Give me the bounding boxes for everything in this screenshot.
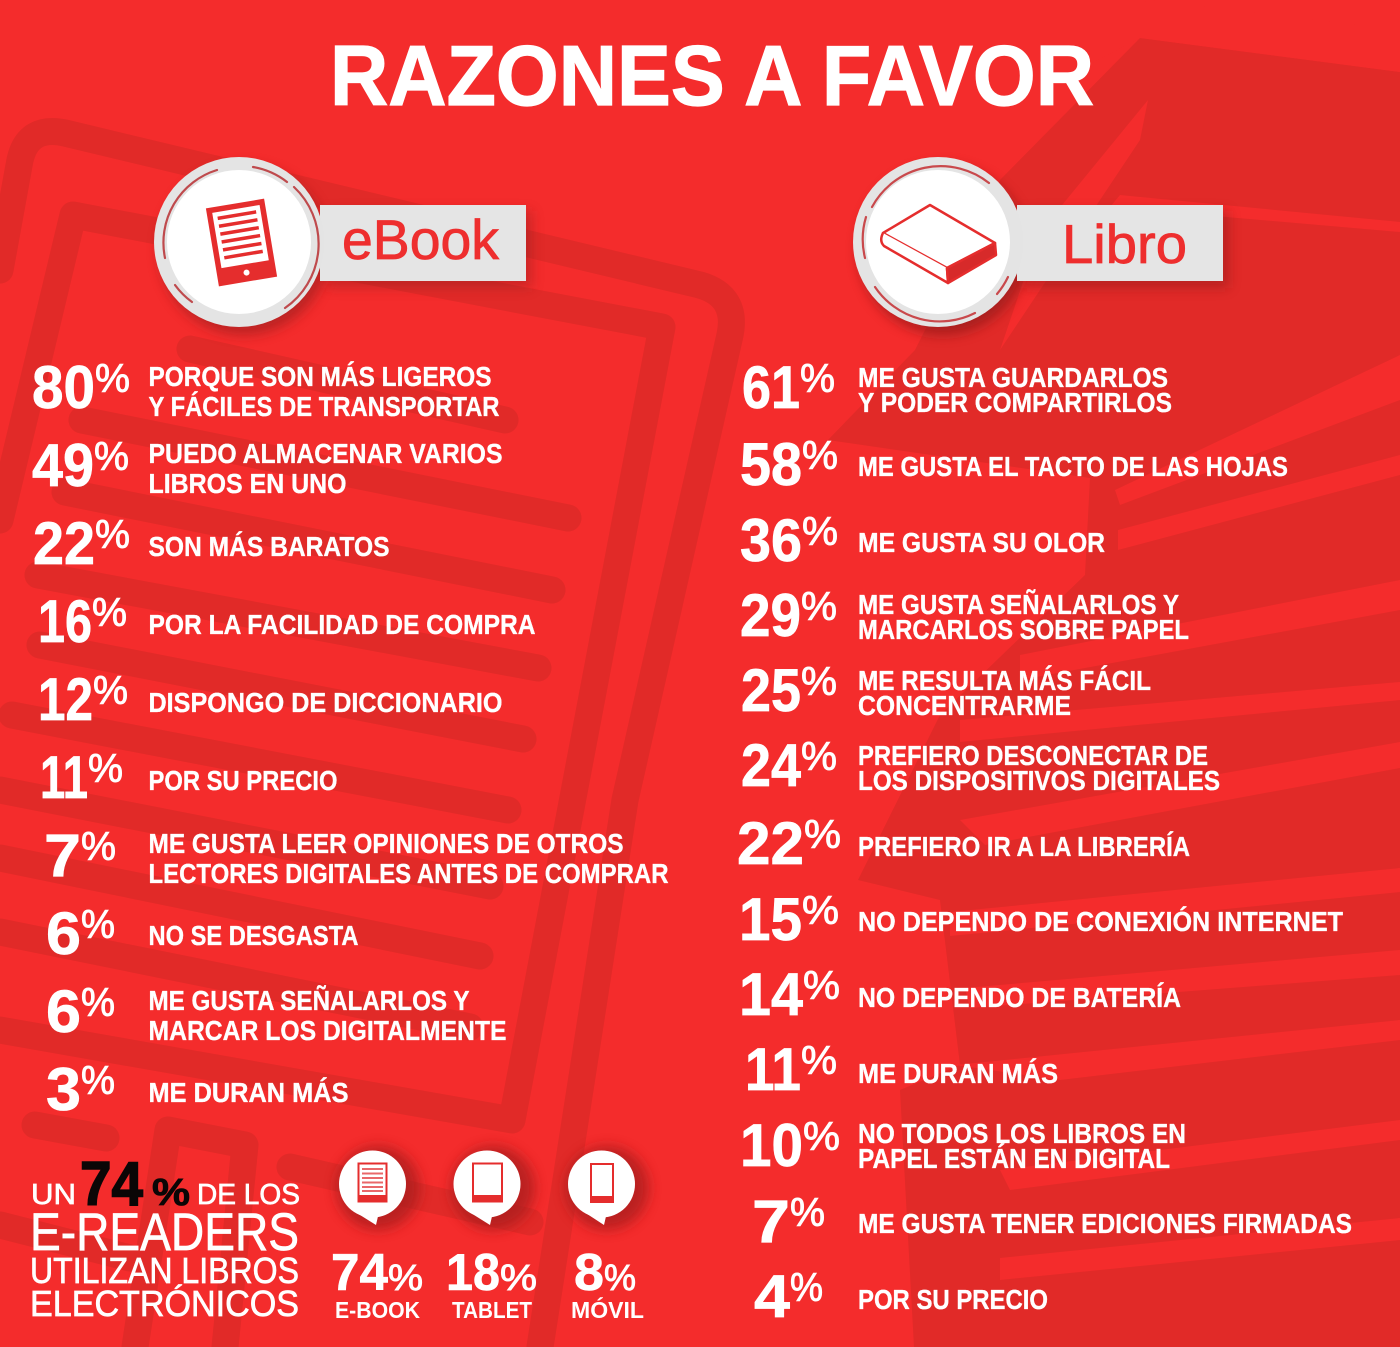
icon: book — [881, 205, 996, 283]
ebook row: 3%: 3 — [46, 1056, 81, 1123]
libro row: 10%: % — [803, 1115, 840, 1159]
device stat: movil: MÓVIL — [571, 1296, 644, 1323]
ebook row: 6% señalarlos: 6 — [46, 978, 81, 1045]
ebook row: 16% — [38, 588, 536, 655]
ebook row: 49%: % — [94, 435, 129, 479]
libro row: 29%: % — [801, 585, 837, 629]
libro row: 25%: 25 — [741, 657, 801, 724]
ebook row: 49% — [32, 432, 502, 499]
ebook row: 7%: LECTORES DIGITALES ANTES DE COMPRAR — [148, 858, 669, 889]
ebook row: 22% — [33, 510, 390, 577]
libro row: 58%: ME GUSTA EL TACTO DE LAS HOJAS — [858, 451, 1288, 482]
libro row: 29%: 29 — [740, 582, 801, 649]
libro row: 58%: 58 — [740, 431, 802, 498]
ebook row: 16%: % — [92, 591, 127, 635]
libro row: 61%: ME GUSTA GUARDARLOS — [858, 362, 1168, 393]
device stat: movil: % — [604, 1257, 636, 1298]
ebook row: 12%: DISPONGO DE DICCIONARIO — [148, 687, 502, 718]
header: Libro — [853, 157, 1229, 335]
ebook row: 7% — [44, 822, 669, 889]
libro row: 7% — [752, 1188, 1352, 1255]
libro row: 10%: NO TODOS LOS LIBROS EN — [858, 1118, 1186, 1149]
libro row: 15%: % — [802, 889, 839, 933]
libro row: 11% — [745, 1036, 1058, 1103]
ebook row: 16%: POR LA FACILIDAD DE COMPRA — [148, 609, 536, 640]
ebook row: 3% — [46, 1056, 348, 1123]
libro row: 14%: NO DEPENDO DE BATERÍA — [858, 982, 1181, 1013]
ebook row: 12%: 12 — [38, 666, 93, 733]
ebook row: 6% señalarlos: MARCAR LOS DIGITALMENTE — [148, 1015, 506, 1046]
icon: e-reader — [206, 199, 277, 286]
title: RAZONES A FAVOR — [330, 29, 1094, 124]
callout: 74% of e-readers: DE LOS — [197, 1179, 300, 1211]
header: eBook — [154, 157, 532, 335]
callout: 74% of e-readers: E-READERS — [30, 1203, 299, 1262]
ebook row: 80%: Y FÁCILES DE TRANSPORTAR — [148, 391, 500, 422]
ebook row: 6% no se desgasta: NO SE DESGASTA — [148, 920, 359, 951]
ebook row: 80%: % — [95, 357, 130, 401]
libro row: 22%: 22 — [737, 810, 804, 877]
background: tilted ebook outline — [0, 132, 731, 1347]
libro row: 58%: % — [802, 434, 838, 478]
libro row: 15%: 15 — [739, 886, 802, 953]
device stat: tablet: TABLET — [452, 1297, 532, 1323]
icon: tablet bubble — [451, 1146, 535, 1230]
ebook row: 7%: % — [81, 825, 116, 869]
ebook row: 49%: 49 — [32, 432, 94, 499]
ebook row: 11% — [40, 744, 338, 811]
callout: 74% of e-readers: ELECTRÓNICOS — [30, 1283, 299, 1324]
icon: e-book bubble — [336, 1146, 420, 1230]
libro row: 7%: 7 — [752, 1188, 790, 1255]
libro row: 25%: ME RESULTA MÁS FÁCIL — [858, 665, 1151, 696]
libro row: 61%: Y PODER COMPARTIRLOS — [858, 387, 1172, 418]
ebook row: 80% — [32, 354, 500, 422]
ebook row: 49%: PUEDO ALMACENAR VARIOS — [148, 438, 502, 469]
libro row: 24%: PREFIERO DESCONECTAR DE — [858, 740, 1208, 771]
libro row: 11%: % — [801, 1039, 837, 1083]
libro row: 22%: PREFIERO IR A LA LIBRERÍA — [858, 831, 1190, 862]
ebook row: 7%: ME GUSTA LEER OPINIONES DE OTROS — [148, 828, 624, 859]
libro row: 25%: % — [801, 660, 837, 704]
libro row: 36%: 36 — [740, 507, 802, 574]
libro row: 36%: ME GUSTA SU OLOR — [858, 527, 1105, 558]
callout: 74% of e-readers: UTILIZAN LIBROS — [30, 1250, 299, 1291]
libro row: 15%: NO DEPENDO DE CONEXIÓN INTERNET — [858, 906, 1343, 937]
libro row: 7%: ME GUSTA TENER EDICIONES FIRMADAS — [858, 1208, 1352, 1239]
libro row: 61% — [742, 354, 1172, 421]
label: Libro: Libro — [1062, 213, 1187, 275]
libro row: 24% — [741, 732, 1220, 799]
ebook row: 49%: LIBROS EN UNO — [148, 468, 346, 499]
background: tilted book shape — [828, 0, 1400, 1347]
libro row: 29%: MARCARLOS SOBRE PAPEL — [858, 614, 1189, 645]
libro row: 58% — [740, 431, 1288, 498]
device stat: movil — [565, 1146, 649, 1323]
device stat: tablet: % — [500, 1257, 537, 1298]
libro row: 10%: PAPEL ESTÁN EN DIGITAL — [858, 1143, 1170, 1174]
libro row: 14%: 14 — [739, 961, 804, 1028]
device stat: e-book: 74 — [331, 1244, 388, 1302]
ebook row: 6% señalarlos — [46, 978, 506, 1046]
ebook row: 11%: % — [88, 747, 123, 791]
ebook row: 6% no se desgasta — [46, 900, 359, 967]
libro row: 10%: 10 — [740, 1112, 803, 1179]
ebook row: 22%: % — [95, 513, 130, 557]
device stat: tablet: 18 — [446, 1244, 500, 1302]
device stat: tablet — [446, 1146, 537, 1323]
label: eBook: eBook — [342, 208, 500, 271]
libro row: 22%: % — [804, 813, 841, 857]
ebook row: 22%: SON MÁS BARATOS — [148, 531, 390, 562]
libro row: 11%: 11 — [745, 1036, 801, 1103]
ebook row: 22%: 22 — [33, 510, 95, 577]
ebook row: 11%: 11 — [40, 744, 88, 811]
callout: 74% of e-readers: % — [152, 1172, 190, 1214]
ebook row: 80%: PORQUE SON MÁS LIGEROS — [148, 361, 492, 392]
libro row: 61%: 61 — [742, 354, 800, 421]
libro row: 4%: 4 — [754, 1263, 791, 1330]
libro row: 25% — [741, 657, 1151, 724]
libro row: 10% — [740, 1112, 1186, 1179]
ebook row: 6% señalarlos: ME GUSTA SEÑALARLOS Y — [148, 985, 470, 1016]
device stat: e-book — [331, 1146, 423, 1323]
libro row: 24%: LOS DISPOSITIVOS DIGITALES — [858, 765, 1220, 796]
ebook row: 12% — [38, 666, 502, 733]
libro row: 4%: POR SU PRECIO — [858, 1284, 1048, 1315]
libro row: 29%: ME GUSTA SEÑALARLOS Y — [858, 589, 1179, 620]
ebook row: 7%: 7 — [44, 822, 81, 889]
callout: 74% of e-readers — [30, 1150, 300, 1324]
ebook row: 16%: 16 — [38, 588, 92, 655]
libro row: 11%: ME DURAN MÁS — [858, 1058, 1058, 1089]
libro row: 36% — [740, 507, 1105, 574]
ebook row: 11%: POR SU PRECIO — [148, 765, 338, 796]
libro row: 61%: % — [800, 357, 835, 401]
ebook row: 12%: % — [93, 669, 128, 713]
device stat: movil: 8 — [574, 1244, 604, 1302]
libro row: 29% — [740, 582, 1189, 649]
libro row: 4%: % — [790, 1266, 823, 1310]
ebook row: 3%: % — [81, 1059, 115, 1103]
libro row: 7%: % — [790, 1191, 825, 1235]
ebook row: 80%: 80 — [32, 354, 95, 421]
libro row: 36%: % — [802, 510, 838, 554]
libro row: 24%: 24 — [741, 732, 802, 799]
ebook row: 6% no se desgasta: % — [81, 903, 115, 947]
libro row: 22% — [737, 810, 1190, 877]
callout: 74% of e-readers: 74 — [80, 1150, 143, 1219]
libro row: 4% — [754, 1263, 1048, 1330]
ebook row: 3%: ME DURAN MÁS — [148, 1077, 348, 1108]
libro row: 25%: CONCENTRARME — [858, 690, 1071, 721]
callout: 74% of e-readers: UN — [31, 1179, 76, 1211]
icon: phone bubble — [565, 1146, 649, 1230]
libro row: 14% — [739, 961, 1181, 1028]
libro row: 14%: % — [803, 964, 840, 1008]
libro row: 24%: % — [801, 735, 837, 779]
device stat: e-book: % — [388, 1257, 423, 1298]
ebook row: 6% no se desgasta: 6 — [46, 900, 81, 967]
ebook row: 6% señalarlos: % — [81, 981, 115, 1025]
device stat: e-book: E-BOOK — [335, 1297, 420, 1323]
libro row: 15% — [739, 886, 1343, 953]
